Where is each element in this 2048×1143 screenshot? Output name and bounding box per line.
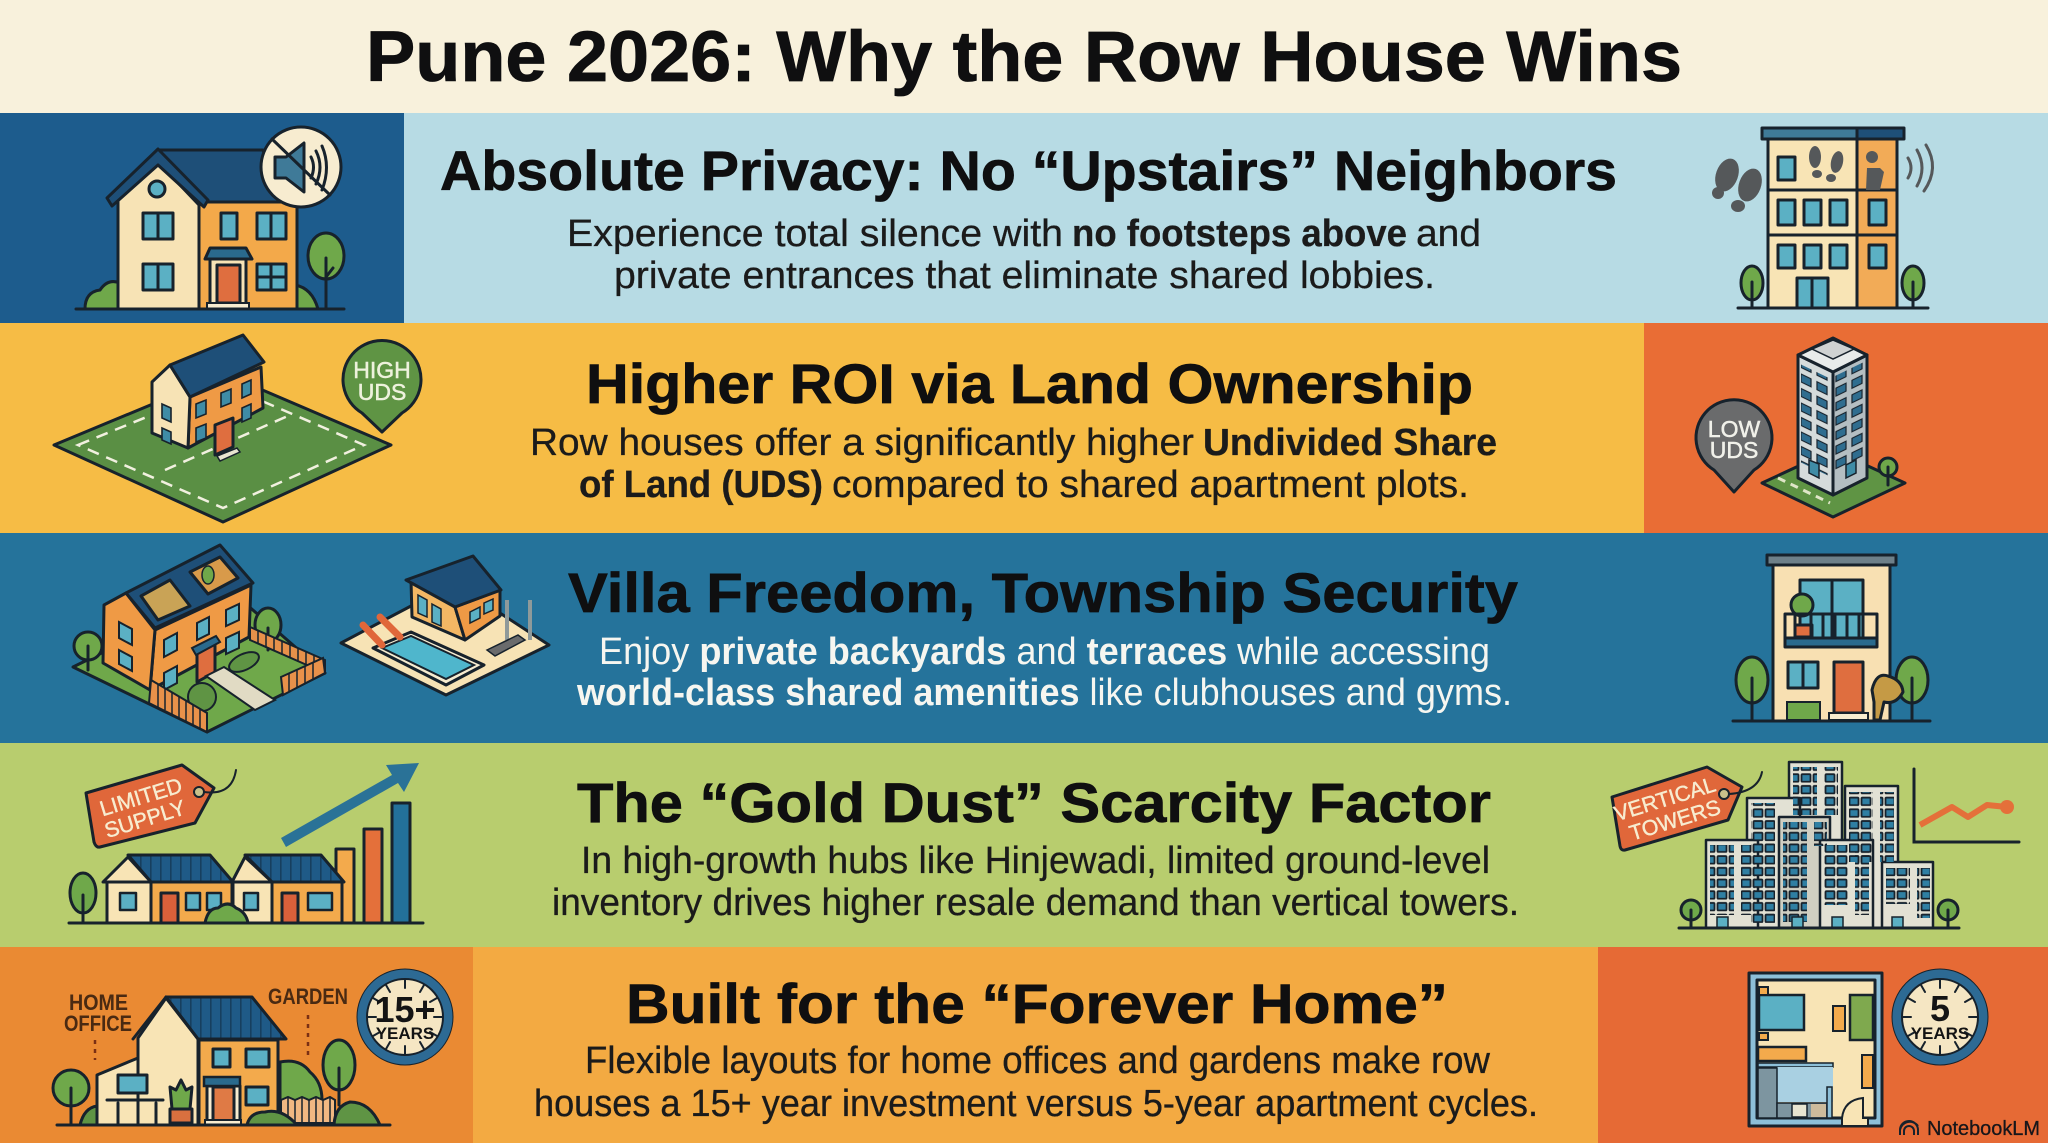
labels: home office and garden: HOME (69, 990, 128, 1015)
body text: and (1416, 213, 1481, 255)
chart: flat line (1914, 769, 2019, 842)
labels: home office and garden: GARDEN (268, 984, 348, 1009)
body text: inventory drives higher resale demand than vertical towers. (552, 882, 1519, 924)
panel: higher ROI (54, 323, 2048, 533)
body text (552, 840, 1519, 924)
body text (576, 631, 1512, 714)
tag: limited supply: LIMITED (97, 773, 185, 821)
panel: villa freedom (73, 545, 1930, 732)
icon: 15+ years clock: 15+ (374, 989, 436, 1030)
body text: Row houses offer a significantly higher (530, 422, 1194, 464)
left panel background (0, 947, 473, 1143)
body text: In high-growth hubs like Hinjewadi, limited ground-level (581, 840, 1490, 882)
icon: apartment floor plan (1749, 973, 1882, 1126)
panel: forever home (0, 947, 2048, 1143)
icon: 5 years clock: 5 (1930, 988, 1950, 1029)
body text: private entrances that eliminate shared lobbies. (614, 255, 1435, 297)
icon: noisy apartment block (1711, 128, 1933, 308)
heading: Absolute Privacy: No “Upstairs” Neighbors (440, 139, 1617, 202)
tag: vertical towers: TOWERS (1627, 795, 1723, 846)
callout: high UDS: HIGH (353, 357, 411, 383)
panel: gold dust (69, 762, 2019, 928)
tag: vertical towers (1611, 767, 1762, 850)
body text: world-class shared amenities like clubhouses and gyms. (576, 672, 1512, 714)
icon: villa with garden (73, 545, 325, 732)
body text: Undivided Share (1203, 422, 1497, 464)
heading: The “Gold Dust” Scarcity Factor (577, 771, 1491, 834)
right panel background (1598, 947, 2048, 1143)
body text: Enjoy private backyards and terraces while accessing (599, 631, 1490, 673)
icon: limited supply houses and rising bars (69, 763, 423, 923)
heading: Built for the “Forever Home” (626, 972, 1448, 1035)
icon: 5 years clock: YEARS (1911, 1024, 1969, 1043)
icon: 5 years clock (1893, 970, 1987, 1064)
panel: absolute privacy (0, 113, 1933, 323)
right panel background (1644, 323, 2048, 533)
callout: high UDS: UDS (358, 379, 406, 405)
body text: compared to shared apartment plots. (832, 464, 1469, 506)
icon: house with office and garden (53, 997, 390, 1125)
title: Pune 2026: Why the Row House Wins (366, 18, 1682, 97)
body text (567, 213, 1481, 297)
body text: Experience total silence with (567, 213, 1063, 255)
body text (534, 1040, 1538, 1125)
body text: no footsteps above (1072, 213, 1407, 255)
icon: townhouse with balcony (1733, 555, 1930, 721)
callout: high UDS (343, 341, 421, 432)
icon: tower cluster (1679, 762, 1959, 928)
tag: limited supply: SUPPLY (102, 796, 188, 843)
icon: pool house (341, 556, 549, 695)
icon: 15+ years clock: YEARS (376, 1024, 434, 1043)
callout: low UDS (1696, 400, 1772, 492)
labels: home office and garden (64, 984, 348, 1036)
icon: muted speaker (261, 127, 341, 207)
callout: low UDS: LOW (1708, 416, 1760, 442)
back fence (250, 627, 325, 673)
icon: footprints (1711, 146, 1884, 212)
arrow (281, 763, 419, 847)
labels: home office and garden: OFFICE (64, 1011, 132, 1036)
tag: limited supply (86, 765, 236, 847)
front fences (149, 680, 207, 732)
heading: Higher ROI via Land Ownership (586, 352, 1473, 415)
heading: Villa Freedom, Township Security (568, 561, 1518, 624)
body text: houses a 15+ year investment versus 5-year apartment cycles. (534, 1083, 1538, 1125)
icon: 15+ years clock (358, 970, 452, 1064)
icon: tower on small plot (1762, 338, 1905, 517)
body text (530, 422, 1497, 506)
logo: NotebookLM: NotebookLM (1927, 1118, 2040, 1140)
tag: vertical towers: VERTICAL (1611, 773, 1719, 826)
left panel background (0, 113, 404, 323)
icon: quiet house (76, 149, 344, 309)
icon: house on large plot (54, 335, 391, 522)
body text: of Land (UDS) (579, 464, 823, 506)
callout: low UDS: UDS (1710, 437, 1758, 463)
body text: Flexible layouts for home offices and gardens make row (585, 1040, 1491, 1082)
